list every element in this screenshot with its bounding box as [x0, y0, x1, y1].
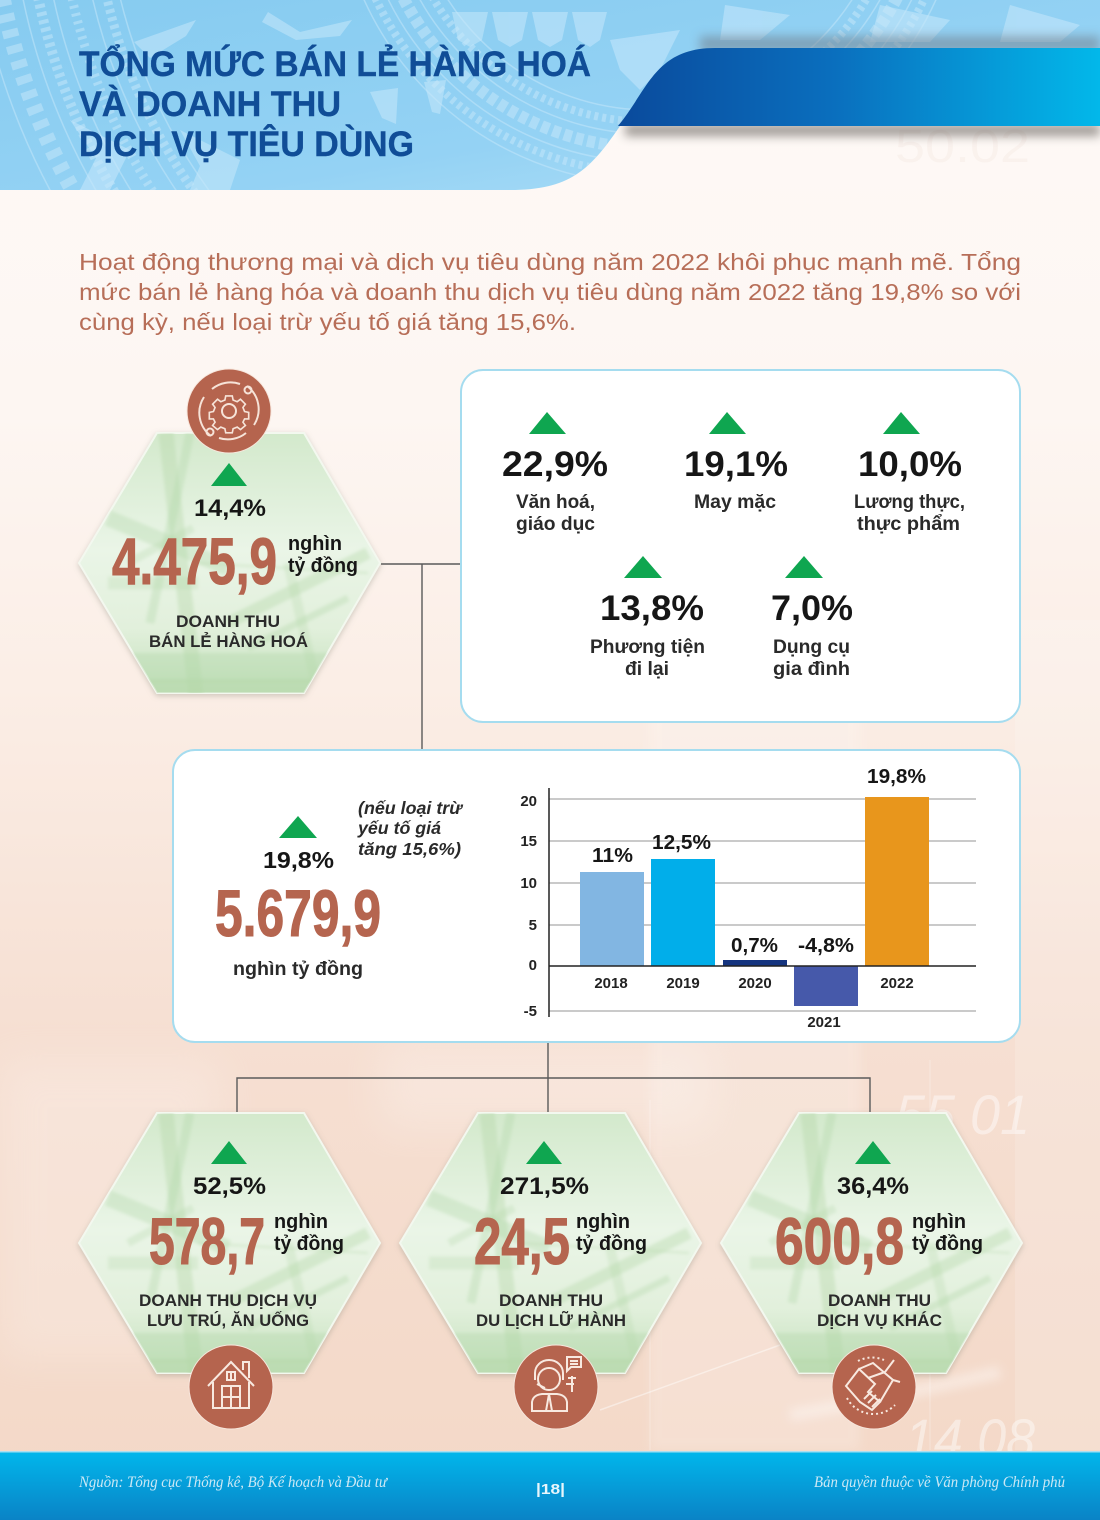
- unit: nghìn: [288, 533, 342, 555]
- stat: household tools: [771, 556, 853, 680]
- stat: culture: 22,9%: [502, 445, 608, 484]
- header: light blue drum pattern shape: [0, 0, 1100, 190]
- title: DỊCH VỤ TIÊU DÙNG: [79, 124, 414, 164]
- stat: garments: 19,1%: [684, 445, 788, 484]
- stat: vehicles: Phương tiện: [590, 637, 705, 658]
- intro paragraph: [79, 249, 1021, 335]
- unit: tỷ đồng: [288, 555, 358, 577]
- bar chart: 15: [520, 833, 537, 850]
- icon: handshake: [832, 1345, 916, 1429]
- icon: house: [189, 1345, 273, 1429]
- hexagon: accommodation and food: DOANH THU DỊCH VỤ: [139, 1291, 317, 1310]
- stat: household tools: Dụng cụ: [773, 637, 850, 658]
- stat: household tools: gia đình: [773, 659, 850, 680]
- hexagon: other services: DỊCH VỤ KHÁC: [817, 1311, 942, 1330]
- stat: culture: giáo dục: [516, 514, 595, 535]
- stat: culture: [502, 412, 608, 535]
- bar chart: 2019: [666, 975, 700, 992]
- hexagon: other services: 36,4%: [837, 1173, 909, 1200]
- stat: food: Lương thực,: [854, 492, 965, 513]
- stat: food: 10,0%: [858, 445, 962, 484]
- header: dark blue ribbon: [618, 36, 1100, 136]
- bar chart: 19,8%: [867, 766, 926, 788]
- growth figure: 14,4%: [194, 495, 266, 522]
- hexagon: travel and tourism: 24,5: [474, 1204, 570, 1278]
- unit: nghìn tỷ đồng: [233, 959, 363, 980]
- footer bar: [0, 1451, 1100, 1520]
- stat: food: thực phẩm: [857, 514, 960, 535]
- stat: culture: Văn hoá,: [516, 492, 595, 513]
- stat: garments: May mặc: [694, 492, 776, 513]
- intro paragraph: cùng kỳ, nếu loại trừ yếu tố giá tăng 15,6%.: [79, 309, 576, 335]
- unit: [288, 533, 358, 577]
- bar chart: 12,5%: [652, 832, 711, 854]
- note: tăng 15,6%): [358, 839, 461, 859]
- connector lines: [237, 564, 870, 1113]
- hexagon: retail revenue: [78, 369, 381, 695]
- hexagon: other services: nghìn: [912, 1211, 966, 1233]
- note: (nếu loại trừ: [358, 798, 464, 818]
- stat: vehicles: 13,8%: [600, 589, 704, 628]
- hexagon: accommodation and food: 578,7: [149, 1204, 265, 1278]
- bar chart: 2020: [738, 975, 772, 992]
- copyright: Bản quyền thuộc về Văn phòng Chính phủ: [814, 1474, 1065, 1491]
- title: VÀ DOANH THU: [79, 84, 341, 124]
- main value: 4.475,9: [112, 524, 277, 598]
- label: DOANH THU: [176, 612, 280, 631]
- bar chart: 10: [520, 875, 537, 892]
- page background: 55 01: [895, 1083, 1030, 1146]
- main value: 5.679,9: [215, 876, 381, 950]
- stat: food: [854, 412, 965, 535]
- hexagon: accommodation and food: LƯU TRÚ, ĂN UỐNG: [147, 1310, 309, 1330]
- bar chart: 2018: [594, 975, 628, 992]
- hexagon: accommodation and food: [78, 1113, 381, 1429]
- hexagon: accommodation and food: 52,5%: [193, 1173, 266, 1200]
- icon: gear: [187, 369, 271, 453]
- title: [79, 44, 591, 164]
- bar chart: 2021: [807, 1014, 841, 1031]
- up arrow: [279, 816, 317, 838]
- hexagon: accommodation and food: tỷ đồng: [274, 1233, 344, 1255]
- icon: support agent: [514, 1345, 598, 1429]
- page background: 14 08: [905, 1407, 1035, 1470]
- panel: retail categories: [461, 370, 1020, 722]
- bar chart: 0,7%: [731, 935, 778, 957]
- note: [357, 798, 464, 859]
- hexagon: other services: DOANH THU: [828, 1291, 931, 1310]
- hexagon: other services: 600,8: [775, 1204, 904, 1278]
- bar chart: -4,8%: [798, 935, 854, 957]
- hexagon: accommodation and food: nghìn: [274, 1211, 328, 1233]
- stat: household tools: 7,0%: [771, 589, 853, 628]
- label: [149, 612, 308, 651]
- hexagon: travel and tourism: nghìn: [576, 1211, 630, 1233]
- note: yếu tố giá: [357, 818, 441, 838]
- source: Nguồn: Tổng cục Thống kê, Bộ Kế hoạch và Đầu tư: [78, 1474, 388, 1491]
- hexagon: travel and tourism: DU LỊCH LỮ HÀNH: [476, 1310, 626, 1330]
- bar chart: 2022: [880, 975, 914, 992]
- hexagon: travel and tourism: [399, 1113, 702, 1429]
- bar chart: 11%: [592, 845, 633, 867]
- intro paragraph: mức bán lẻ hàng hóa và doanh thu dịch vụ tiêu dùng năm 2022 tăng 19,8% so với: [79, 279, 1021, 305]
- stat: garments: [684, 412, 788, 513]
- bar chart: 20: [520, 793, 537, 810]
- hexagon: travel and tourism: tỷ đồng: [576, 1233, 647, 1255]
- page number: |18|: [536, 1481, 565, 1498]
- hexagon: travel and tourism: DOANH THU: [499, 1291, 603, 1310]
- up arrow: [211, 463, 247, 486]
- stat: vehicles: đi lại: [625, 659, 669, 680]
- intro paragraph: Hoạt động thương mại và dịch vụ tiêu dùng năm 2022 khôi phục mạnh mẽ. Tổng: [79, 249, 1021, 275]
- bar chart: 5: [529, 917, 537, 934]
- page background: 50.02: [895, 120, 1030, 172]
- panel: total and chart: [173, 750, 1020, 1042]
- title: TỔNG MỨC BÁN LẺ HÀNG HOÁ: [79, 44, 591, 84]
- bar chart: -5: [524, 1003, 537, 1020]
- hexagon: other services: tỷ đồng: [912, 1233, 983, 1255]
- hexagon: travel and tourism: 271,5%: [500, 1173, 589, 1200]
- hexagon: other services: [720, 1113, 1023, 1429]
- label: BÁN LẺ HÀNG HOÁ: [149, 632, 308, 651]
- stat: vehicles: [590, 556, 705, 680]
- bar chart: 0: [529, 957, 537, 974]
- growth figure: 19,8%: [263, 847, 334, 873]
- bar chart: [520, 766, 976, 1031]
